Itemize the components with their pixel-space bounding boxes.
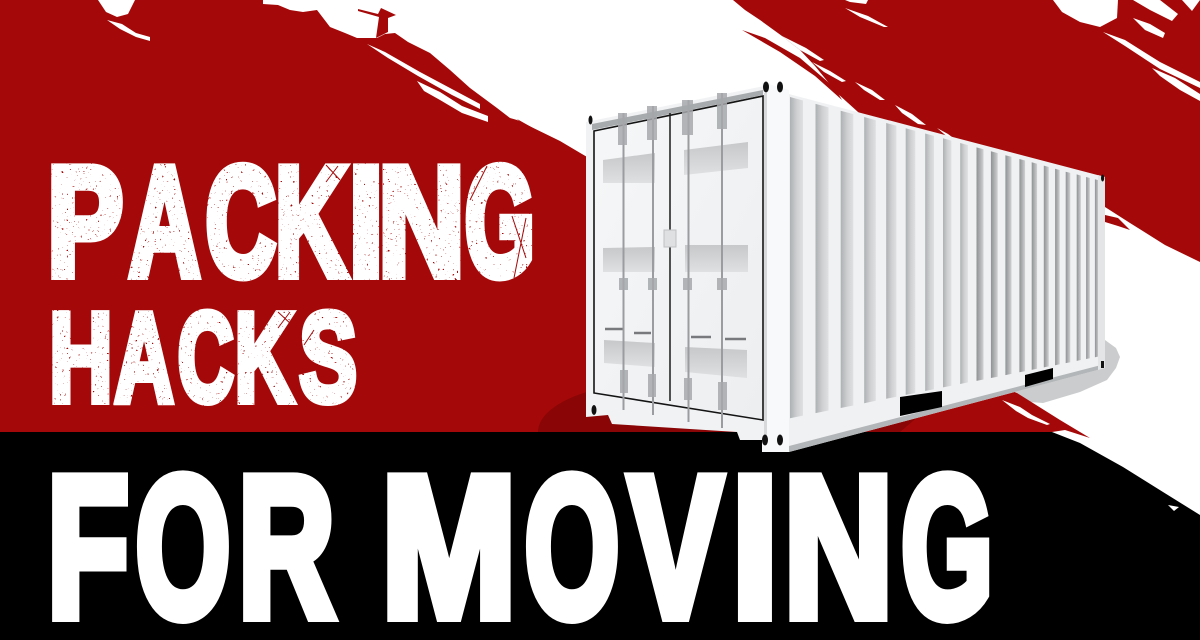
corrugated side channels bbox=[790, 97, 968, 418]
distress cracks on letters bbox=[278, 165, 526, 345]
latch plates bbox=[618, 93, 727, 410]
front corner post bbox=[762, 82, 789, 452]
heading: HACKS: K bbox=[235, 286, 293, 428]
door handles bbox=[605, 329, 746, 339]
top door rail bbox=[592, 90, 763, 130]
locking bars bbox=[624, 93, 722, 428]
door hasp bbox=[664, 230, 676, 247]
heading: HACKS: H bbox=[49, 286, 113, 428]
ground shadow on white bbox=[1000, 340, 1120, 403]
title: distressed PACKING HACKS bbox=[47, 135, 535, 428]
container shadow on red bbox=[538, 382, 1052, 482]
heading: PACKING: C bbox=[206, 135, 276, 308]
door recesses bbox=[603, 142, 748, 378]
container side wall bbox=[762, 93, 1105, 452]
heading: PACKING: K bbox=[275, 135, 347, 308]
corner casting holes bbox=[588, 82, 1104, 446]
black footer band bbox=[0, 432, 1200, 640]
center door seam bbox=[669, 113, 671, 401]
heading: PACKING: G bbox=[465, 135, 535, 308]
far end post bbox=[1098, 175, 1105, 370]
heading: PACKING: I bbox=[349, 135, 383, 308]
heading: PACKING: A bbox=[129, 135, 200, 308]
fork pockets bbox=[900, 368, 1053, 416]
brush streak: red on white, right bbox=[1105, 215, 1130, 230]
door frame bbox=[586, 86, 764, 440]
lower red brush tip bbox=[900, 393, 1090, 438]
far side channels bbox=[976, 147, 1099, 381]
shipping container illustration bbox=[586, 82, 1105, 452]
heading: HACKS: C bbox=[178, 286, 234, 428]
brush streaks: white on red, upper right bbox=[782, 0, 1200, 140]
brush streaks: white on red, upper left bbox=[98, 0, 488, 122]
door panel bbox=[594, 96, 763, 420]
brush streaks: red on white, upper left bbox=[358, 8, 587, 157]
heading: PACKING: N bbox=[378, 135, 465, 308]
white speck on black bbox=[1168, 505, 1179, 511]
heading: HACKS: S bbox=[299, 286, 357, 428]
brush streak: red on white, upper right edge bbox=[742, 30, 842, 100]
white brush stroke bbox=[263, 0, 1200, 515]
heading: HACKS: A bbox=[115, 286, 174, 428]
lower rail edge bbox=[789, 364, 1105, 452]
heading: PACKING: P bbox=[47, 135, 123, 308]
